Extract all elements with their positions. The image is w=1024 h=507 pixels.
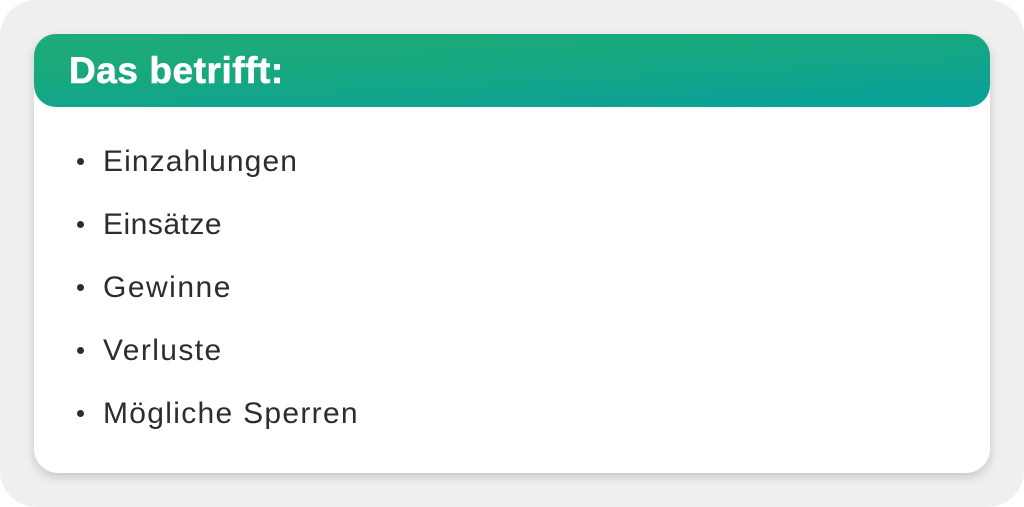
list item: Gewinne: Gewinne (103, 271, 232, 304)
list item: Einsätze: Einsätze (103, 208, 222, 241)
list item: Verluste: Verluste (103, 334, 223, 367)
heading: Das betrifft: (69, 50, 284, 91)
list item: Mögliche Sperren: Mögliche Sperren (103, 397, 359, 430)
list item: Einzahlungen: Einzahlungen (103, 145, 298, 178)
header bar (34, 34, 990, 107)
